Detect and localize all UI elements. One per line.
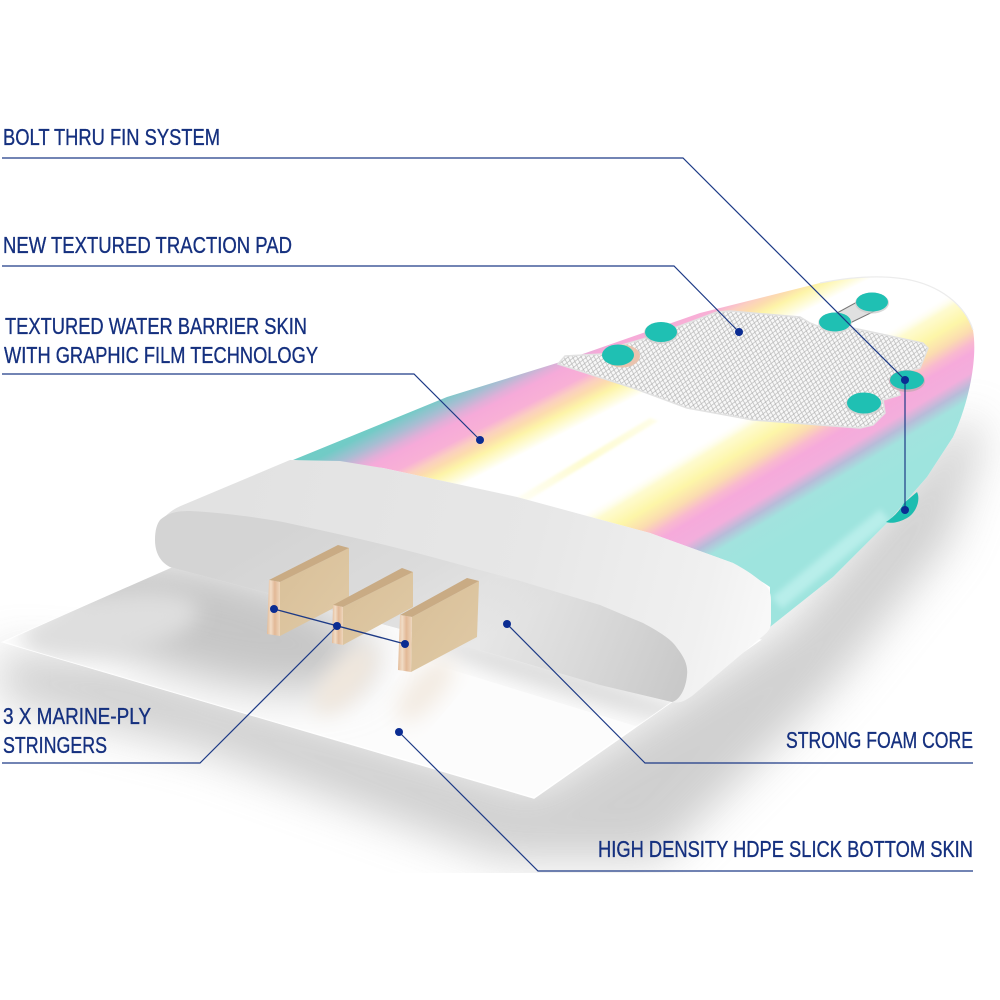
callout: bolt thru fin system — [2, 124, 909, 514]
stringer 3 — [398, 578, 479, 672]
foam top and end face — [156, 460, 771, 703]
callout: strong foam core — [503, 620, 973, 763]
callout: marine-ply stringers — [2, 605, 409, 763]
panel: bottom skin sheet — [2, 568, 762, 799]
panel: fin box channel — [837, 302, 883, 323]
icon: side fin — [886, 492, 918, 523]
callout: bolt thru fin system: BOLT THRU FIN SYSTEM — [3, 124, 220, 150]
nose outline — [820, 277, 973, 330]
stringer 1 — [267, 545, 349, 636]
right stripes — [588, 299, 974, 627]
icon: traction pad bolts — [602, 292, 925, 416]
callout: textured water barrier skin — [2, 313, 484, 444]
callout: textured water barrier skin: WITH GRAPHIC FILM TECHNOLOGY — [4, 342, 318, 368]
callout: hdpe slick bottom skin — [395, 728, 973, 871]
rail highlight — [777, 515, 885, 603]
foam front cut face — [155, 511, 687, 702]
panel: foam core — [155, 460, 771, 703]
callout: marine-ply stringers: 3 X MARINE-PLY — [3, 703, 151, 729]
callout: new textured traction pad: NEW TEXTURED TRACTION PAD — [3, 232, 292, 258]
faint yellow stripe — [519, 418, 657, 500]
callout: new textured traction pad — [2, 232, 743, 336]
panel: textured traction pad — [558, 311, 928, 428]
panel: board deck with graphic film stripes — [293, 278, 974, 627]
stringer 2 — [332, 568, 413, 645]
callout: marine-ply stringers: STRINGERS — [3, 732, 107, 758]
left stripes — [293, 278, 930, 485]
panel: marine-ply stringers — [267, 545, 479, 672]
shadow under board and sheet — [0, 420, 985, 860]
callout: textured water barrier skin: TEXTURED WATER BARRIER SKIN — [5, 313, 307, 339]
